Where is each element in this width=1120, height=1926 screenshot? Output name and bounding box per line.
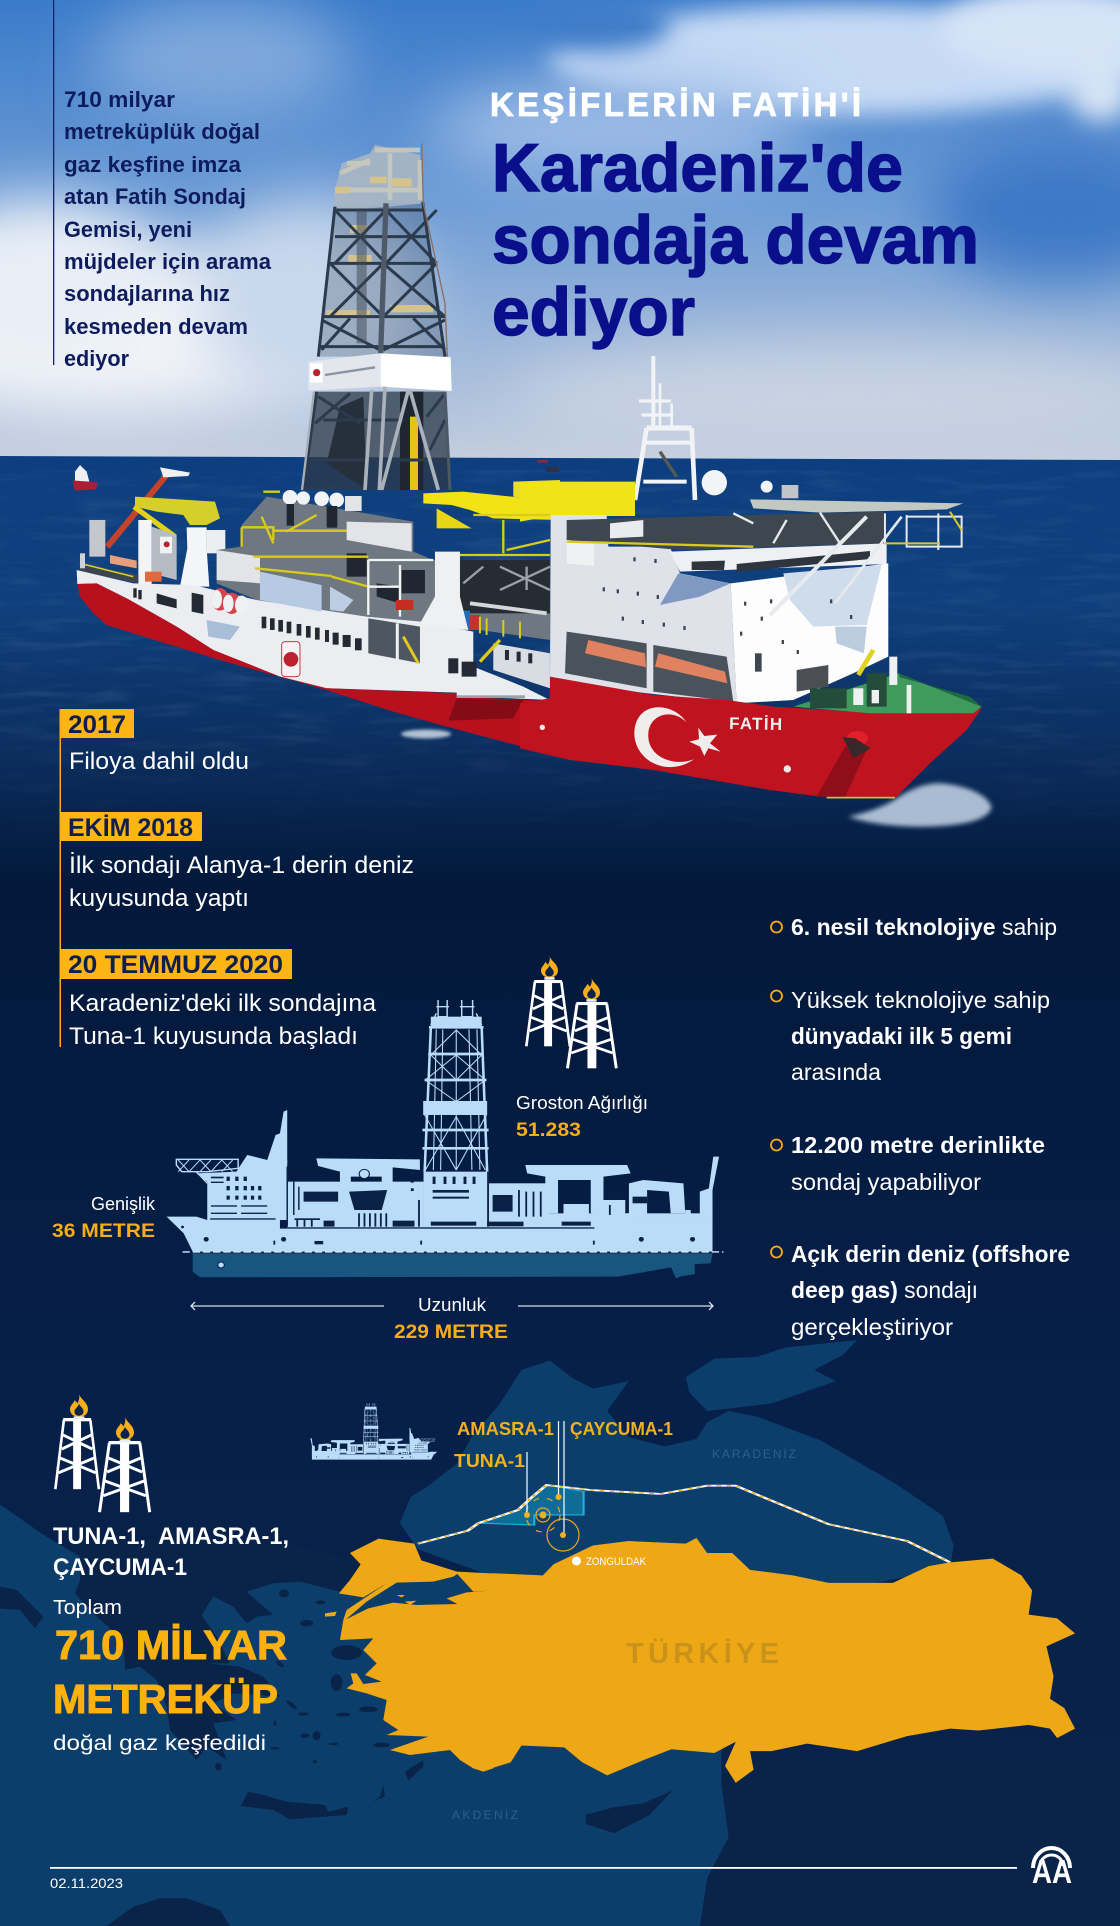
map labels: [452, 1447, 796, 1822]
discovery summary: doğal gaz keşfedildi: [53, 1732, 266, 1755]
bullet: top 5 ships: arasında: [791, 1059, 881, 1085]
intro text block: 710 milyar: [64, 87, 175, 112]
discovery summary: TUNA-1, AMASRA-1,: [53, 1523, 289, 1550]
title: KEŞİFLERİN FATİH'İ: [490, 86, 861, 123]
bullet: drilling depth: sondaj yapabiliyor: [791, 1169, 981, 1195]
background: sky: [0, 0, 1120, 460]
well labels: [454, 1419, 673, 1471]
intro text block: ediyor: [64, 346, 129, 371]
hull below waterline: [193, 1253, 713, 1279]
map labels: TÜRKİYE: [626, 1637, 779, 1670]
Cyprus: [586, 1790, 673, 1833]
2020 entry: 20 TEMMUZ 2020: [68, 951, 283, 979]
2018 entry: EKİM 2018: [68, 814, 193, 842]
intro text block: gaz keşfine imza: [64, 152, 242, 177]
bullet: 6th generation: 6. nesil teknolojiye sahip: [791, 914, 1057, 940]
hull foam: [401, 730, 451, 738]
title: Karadeniz'de: [492, 130, 903, 206]
date: 02.11.2023: [50, 1875, 123, 1891]
length label: 229 METRE: [394, 1322, 508, 1343]
derrick tower: [302, 143, 452, 490]
footer rule: [50, 1867, 1017, 1869]
bullet: top 5 ships: dünyadaki ilk 5 gemi: [791, 1023, 1012, 1049]
intro text block: atan Fatih Sondaj: [64, 184, 246, 209]
silhouette above waterline: [167, 1000, 719, 1252]
distant support vessels: [73, 460, 559, 491]
Turkish flag crescent and star: [634, 707, 721, 767]
discovery summary: 710 MİLYAR: [55, 1622, 287, 1668]
length label: Uzunluk: [418, 1295, 487, 1315]
map labels: KARADENİZ: [712, 1447, 796, 1461]
gross tonnage label: [516, 1093, 648, 1141]
discovery summary: ÇAYCUMA-1: [53, 1554, 187, 1581]
map base seas: [0, 1340, 954, 1926]
forward superstructure: [550, 512, 888, 703]
ship name: FATİH: [729, 714, 782, 734]
background: sea ripples: [0, 470, 1120, 765]
intro text block: Gemisi, yeni: [64, 217, 192, 242]
Anadolu Agency logo: AA: [1032, 1853, 1072, 1890]
bullet: top 5 ships: Yüksek teknolojiye sahip: [791, 987, 1050, 1013]
well markers on map: [524, 1421, 579, 1551]
width label: [52, 1194, 156, 1242]
2018 entry: [60, 812, 414, 912]
gas pipeline: [418, 1485, 950, 1562]
intro text block: [64, 87, 272, 371]
title: [490, 86, 979, 350]
bullet: offshore deep gas: Açık derin deniz (offshore: [791, 1241, 1070, 1267]
forward red hull: [520, 677, 982, 798]
2017 entry: Filoya dahil oldu: [69, 748, 249, 775]
yellow gantries and radar domes: [423, 470, 798, 528]
title: ediyor: [492, 274, 695, 350]
Mediterranean and Aegean seas: [0, 1504, 736, 1926]
2020 entry: [60, 949, 377, 1050]
drill ship photograph: [73, 143, 992, 827]
Crete: [241, 1792, 348, 1819]
bullet: top 5 ships: [771, 987, 1050, 1085]
exploration block: [479, 1485, 584, 1525]
width label: Genişlik: [91, 1194, 156, 1214]
helideck: [733, 499, 963, 615]
width label: 36 METRE: [52, 1221, 155, 1242]
mid-deck equipment: [217, 490, 550, 640]
2020 entry: Tuna-1 kuyusunda başladı: [69, 1023, 358, 1050]
gross tonnage label: Groston Ağırlığı: [516, 1093, 648, 1113]
North African coast: [107, 1898, 230, 1926]
2017 entry: [60, 709, 249, 775]
bullet: drilling depth: 12.200 metre derinlikte: [791, 1132, 1045, 1158]
exploration block and pipeline: [418, 1485, 950, 1562]
stern crane: [89, 467, 220, 557]
bullet: offshore deep gas: deep gas) sondajı: [791, 1277, 978, 1303]
lifeboat bay: [565, 632, 733, 702]
ship silhouette side view: [167, 1000, 723, 1279]
2020 entry: Karadeniz'deki ilk sondajına: [69, 990, 377, 1017]
background: sea: [0, 456, 1120, 887]
length arrows: [191, 1302, 713, 1310]
bullet: drilling depth: [771, 1132, 1045, 1195]
stern deck equipment: [80, 520, 225, 587]
2018 entry: İlk sondajı Alanya-1 derin deniz: [69, 852, 414, 879]
discovery summary: Toplam: [53, 1597, 122, 1619]
aft red hull: [77, 583, 560, 757]
Black Sea: [400, 1361, 954, 1587]
feature bullet list: [771, 914, 1070, 1340]
aft white hull side: [77, 552, 550, 700]
bow deck: [793, 650, 982, 713]
2017 entry: 2017: [68, 711, 126, 739]
Sea of Azov: [686, 1340, 857, 1411]
gross tonnage label: 51.283: [516, 1120, 581, 1141]
well labels: AMASRA-1: [457, 1419, 554, 1439]
icon: gas rigs with flames (bottom): [55, 1394, 150, 1512]
intro text block: sondajlarına hız: [64, 281, 230, 306]
map west: Greece, islands, western Türkiye: [0, 1540, 423, 1926]
bullet: offshore deep gas: gerçekleştiriyor: [791, 1314, 953, 1340]
side vertical rule: [53, 0, 54, 365]
background: deep navy: [0, 885, 1120, 1926]
Italy: [0, 1587, 43, 1628]
mainland Greece and Balkans: [75, 1540, 362, 1760]
timeline: [60, 709, 414, 1050]
lower derrick legs: [302, 387, 450, 490]
Türkiye shape: [325, 1538, 1075, 1783]
well labels: TUNA-1: [454, 1451, 525, 1471]
intro text block: müjdeler için arama: [64, 249, 272, 274]
map labels: AKDENİZ: [452, 1808, 518, 1822]
bullet: offshore deep gas: [771, 1241, 1070, 1340]
intro text block: metreküplük doğal: [64, 119, 260, 144]
bow wake and foam: [848, 783, 992, 827]
well labels: ÇAYCUMA-1: [570, 1419, 673, 1439]
background: clouds: [0, 0, 1120, 455]
mast: [635, 356, 695, 500]
discovery summary: METREKÜP: [53, 1676, 278, 1722]
small ship icon on map: [310, 1403, 437, 1460]
derrick signage band: [308, 353, 452, 391]
Zonguldak marker: ZONGULDAK: [586, 1556, 647, 1568]
intro text block: kesmeden devam: [64, 314, 248, 339]
discovery summary: [53, 1523, 289, 1755]
length label: [394, 1295, 508, 1343]
Aegean islands: [215, 1589, 423, 1802]
2018 entry: kuyusunda yaptı: [69, 885, 249, 912]
title: sondaja devam: [492, 202, 979, 278]
icon: gas rigs with flames (top): [526, 956, 616, 1068]
